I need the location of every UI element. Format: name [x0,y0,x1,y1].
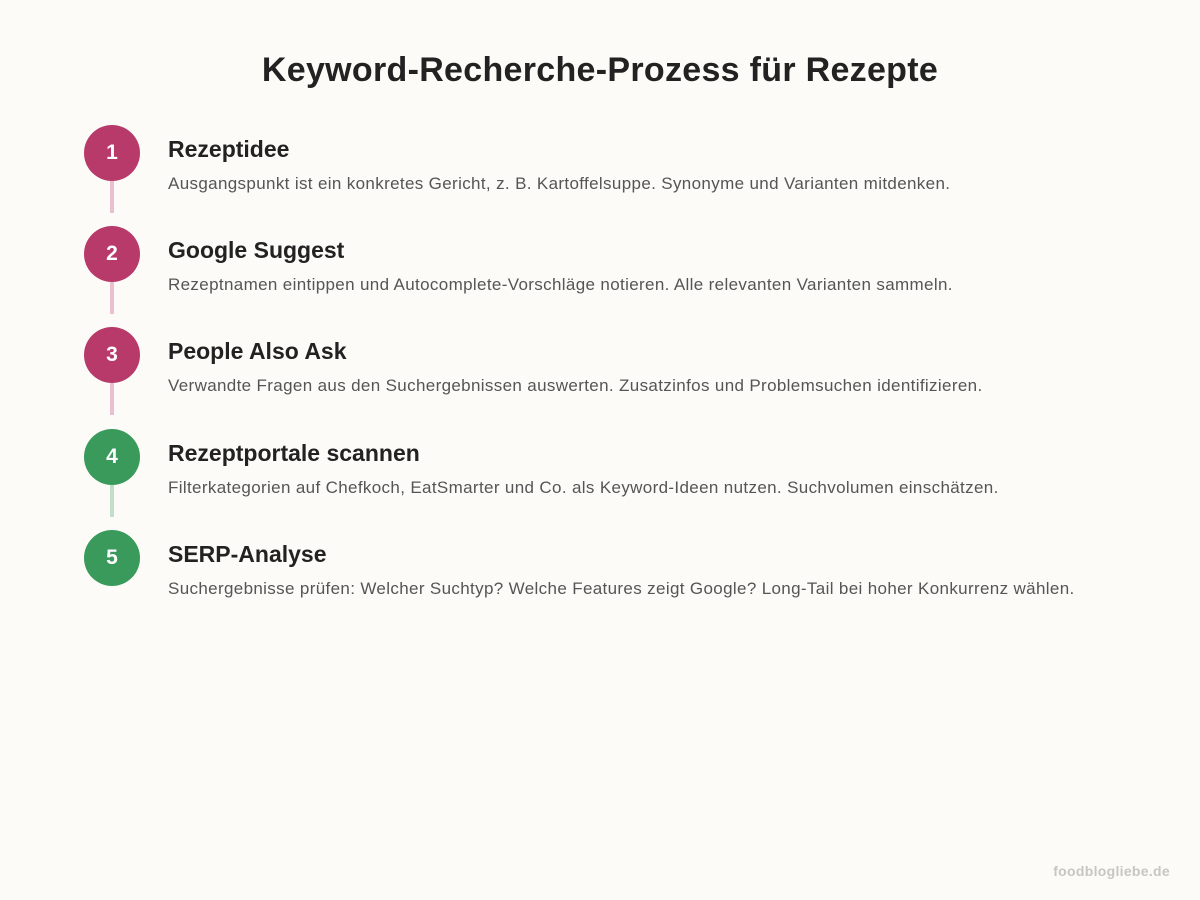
step 1 [84,125,950,213]
step 5: 5 [106,546,118,569]
step 2: Rezeptnamen eintippen und Autocomplete-Vorschläge notieren. Alle relevanten Varianten sammeln. [168,275,953,294]
step 4: 4 [106,445,118,468]
step 1: Rezeptidee [168,136,289,162]
step 3: 3 [106,343,118,366]
footer credit: foodblogliebe.de [1053,863,1170,879]
step 5: SERP-Analyse [168,541,327,567]
step 3: Verwandte Fragen aus den Suchergebnissen auswerten. Zusatzinfos und Problemsuchen identifizieren. [168,376,983,395]
step 3: People Also Ask [168,338,347,364]
step 1: Ausgangspunkt ist ein konkretes Gericht, z. B. Kartoffelsuppe. Synonyme und Varianten mitdenken. [168,174,950,193]
title: Keyword-Recherche-Prozess für Rezepte [262,51,938,89]
step 4: Filterkategorien auf Chefkoch, EatSmarter und Co. als Keyword-Ideen nutzen. Suchvolumen einschätzen. [168,478,999,497]
step 2: Google Suggest [168,237,344,263]
step 1: 1 [106,141,118,164]
step 4 [84,429,999,517]
step 2: 2 [106,242,118,265]
step 3 [84,327,983,415]
step 5: Suchergebnisse prüfen: Welcher Suchtyp? Welche Features zeigt Google? Long-Tail bei hoher Konkurrenz wählen. [168,579,1075,598]
step 4: Rezeptportale scannen [168,440,420,466]
step 5 [84,530,1075,598]
step 2 [84,226,953,314]
